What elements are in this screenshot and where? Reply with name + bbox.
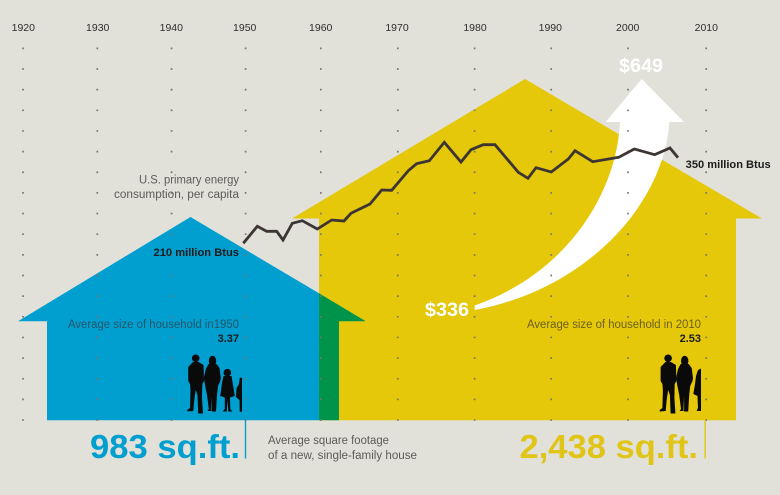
2010 square footage figure: 2,438 sq.ft.	[520, 428, 698, 465]
cost arrow: $336 to $649	[475, 79, 684, 310]
year axis labels: 1930	[86, 22, 110, 34]
icon: family of 2.53 silhouettes	[660, 354, 701, 414]
dotted year gridlines	[23, 48, 706, 421]
house 1950: blue	[18, 217, 319, 420]
house overlap: green	[319, 293, 366, 420]
energy chart label	[114, 174, 240, 201]
household size 1950 text: 3.37	[218, 333, 239, 345]
year axis labels: 1970	[385, 22, 409, 34]
energy chart label: consumption, per capita	[114, 189, 240, 201]
year axis labels: 2010	[695, 22, 718, 34]
energy consumption line chart	[243, 142, 678, 243]
cost label: $649: $649	[619, 55, 663, 77]
square footage description: Average square footage	[268, 435, 389, 447]
energy chart label: U.S. primary energy	[139, 174, 239, 186]
household size 2010 text: Average size of household in 2010	[527, 319, 701, 331]
household size 2010 text	[527, 319, 701, 345]
year axis labels: 1940	[160, 22, 183, 34]
household size 1950 text	[68, 319, 239, 345]
year axis labels: 1950	[233, 22, 257, 34]
year axis labels: 1980	[463, 22, 487, 34]
year axis labels: 1960	[309, 22, 333, 34]
year axis labels	[12, 22, 718, 34]
square footage description	[268, 435, 417, 462]
2010 marker line	[704, 420, 706, 458]
square footage description: of a new, single-family house	[268, 450, 417, 462]
year axis labels: 2000	[616, 22, 640, 34]
icon: family of 3.37 silhouettes	[187, 354, 242, 414]
1950 marker line	[245, 420, 246, 458]
household size 1950 text: Average size of household in1950	[68, 319, 239, 331]
value label: 210 million Btus: 210 million Btus	[154, 247, 239, 259]
household size 2010 text: 2.53	[680, 333, 701, 345]
value label: 350 million Btus: 350 million Btus	[686, 159, 771, 171]
year axis labels: 1990	[539, 22, 562, 34]
cost label: $336: $336	[425, 299, 469, 321]
1950 square footage figure: 983 sq.ft.	[90, 428, 240, 465]
year axis labels: 1920	[12, 22, 35, 34]
house 2010: yellow	[292, 79, 762, 420]
